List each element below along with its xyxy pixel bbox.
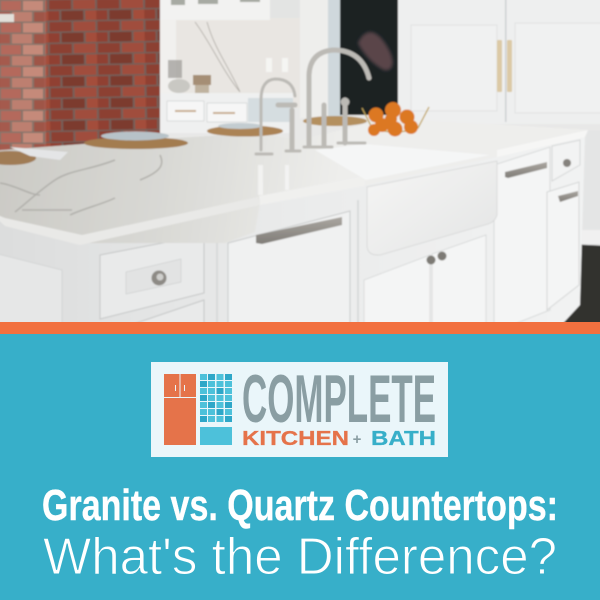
back wall with marble backsplash (160, 0, 342, 118)
canisters on sideboard (168, 60, 211, 94)
farmhouse sink (315, 144, 497, 255)
wooden chargers and plates (0, 116, 367, 165)
right wall and floor (563, 232, 600, 322)
orange divider band (0, 322, 600, 334)
logo wordmark: BATH: BATH (371, 427, 436, 450)
island cabinets (0, 135, 585, 332)
icon: kitchen cabinet and tiles (164, 374, 232, 445)
thinning overlay for title line 2: What's the Difference? (43, 528, 557, 586)
logo (151, 361, 448, 457)
title line 2: What's the Difference? (43, 528, 557, 586)
logo plus sign: + (353, 431, 362, 448)
upper glass cabinets (158, 0, 270, 20)
bowl of oranges (362, 102, 429, 136)
upper right cabinets (398, 0, 600, 124)
white sideboard (160, 93, 293, 133)
teal background panel (0, 334, 600, 600)
marble countertop (0, 130, 588, 244)
logo wordmark: KITCHEN: KITCHEN (242, 427, 349, 450)
faucets (256, 50, 369, 154)
cabinet handles and knobs (152, 159, 578, 286)
kitchen photo (0, 0, 600, 332)
brick wall (0, 0, 161, 155)
painting (340, 0, 399, 115)
